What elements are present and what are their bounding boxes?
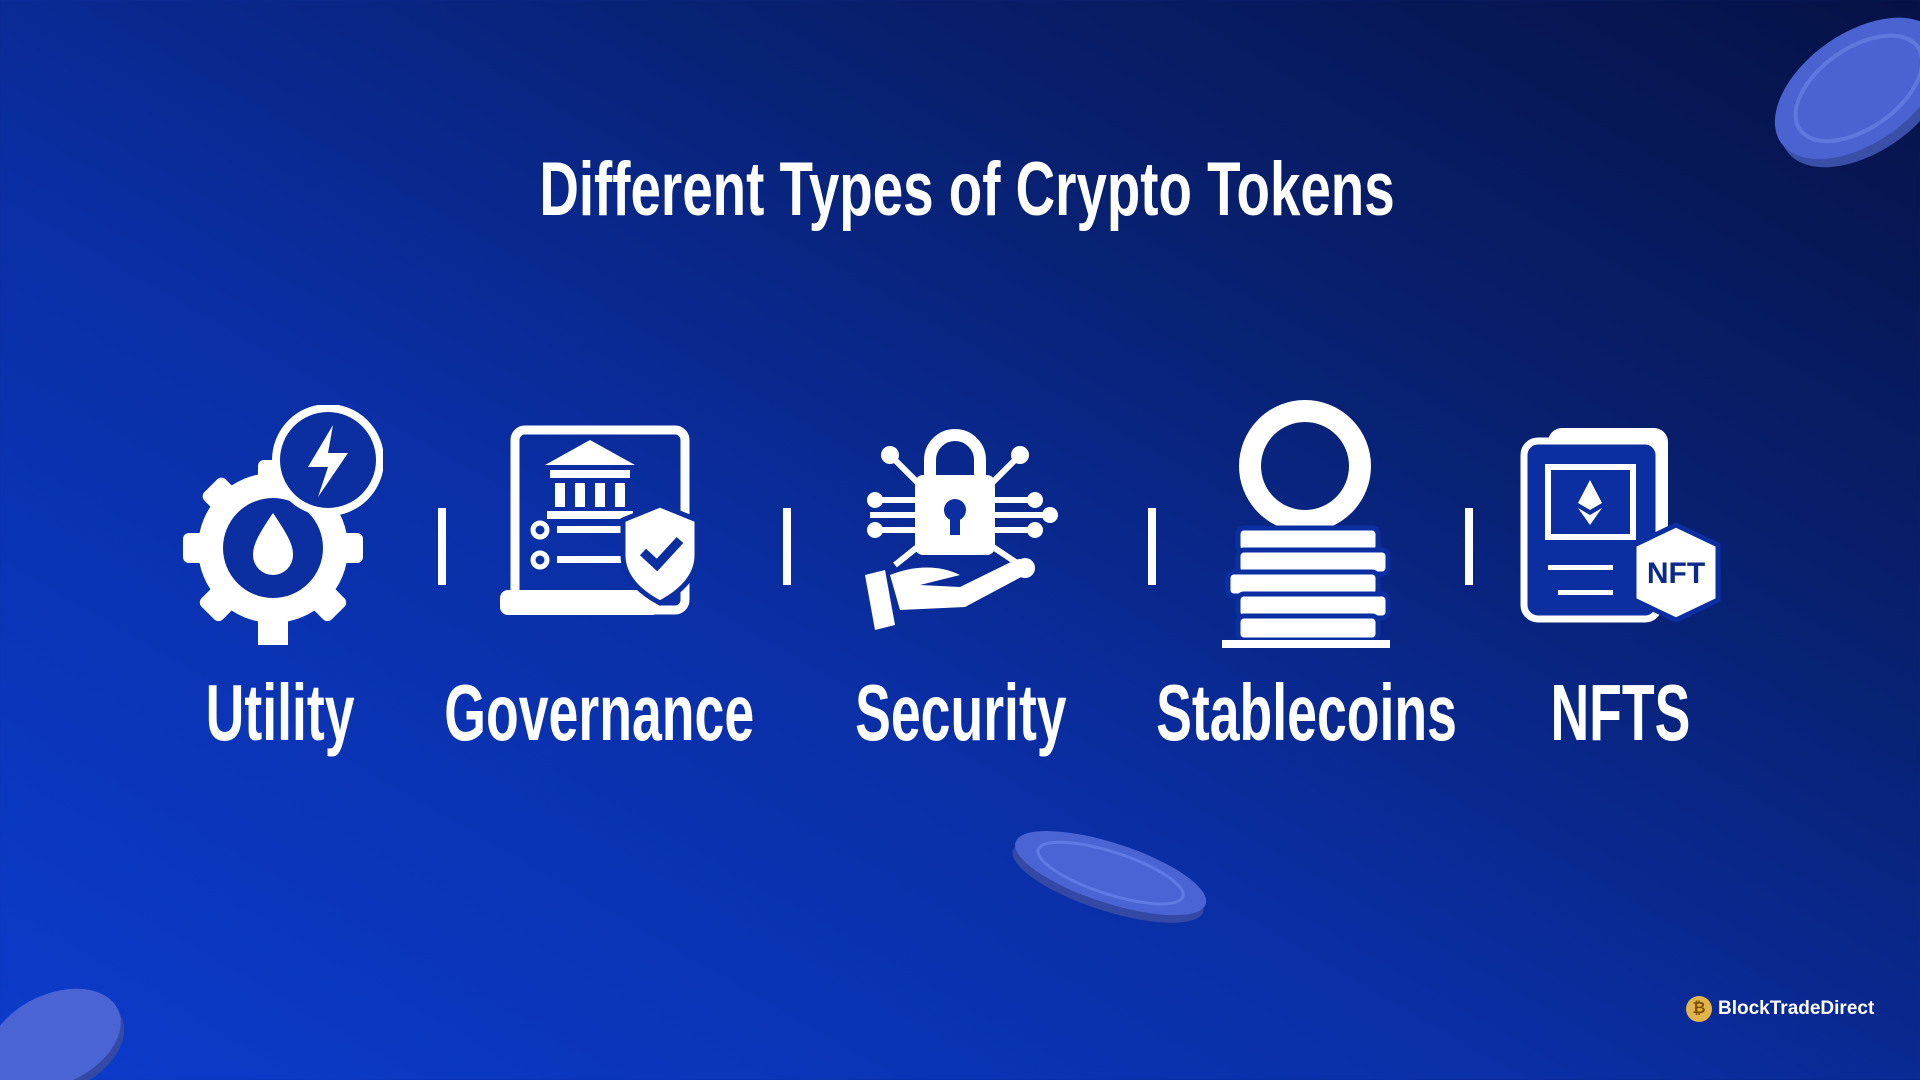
divider	[1465, 508, 1473, 585]
decorative coin bottom left	[0, 988, 124, 1080]
icon: NFT card: NFT	[1647, 557, 1705, 590]
icon: governance document	[500, 426, 694, 615]
icon: stablecoins stack	[1222, 400, 1390, 648]
divider	[438, 508, 446, 585]
icon: security lock with hand	[865, 429, 1058, 630]
label: Stablecoins: Stablecoins	[1157, 668, 1457, 757]
divider	[783, 508, 791, 585]
label: Security: Security	[855, 668, 1067, 757]
label: Governance: Governance	[444, 668, 754, 757]
logo	[1686, 996, 1874, 1022]
icon: NFT card	[1520, 428, 1720, 623]
decorative coin top right	[1774, 18, 1920, 168]
logo: ₿	[1692, 1000, 1706, 1017]
decorative coin middle	[1012, 831, 1206, 923]
title: Different Types of Crypto Tokens	[539, 147, 1395, 232]
label: NFTS: NFTS	[1550, 668, 1690, 757]
divider	[1148, 508, 1156, 585]
logo: BlockTradeDirect	[1718, 998, 1874, 1019]
label: Utility: Utility	[206, 668, 354, 757]
icon: utility gear	[183, 405, 383, 645]
